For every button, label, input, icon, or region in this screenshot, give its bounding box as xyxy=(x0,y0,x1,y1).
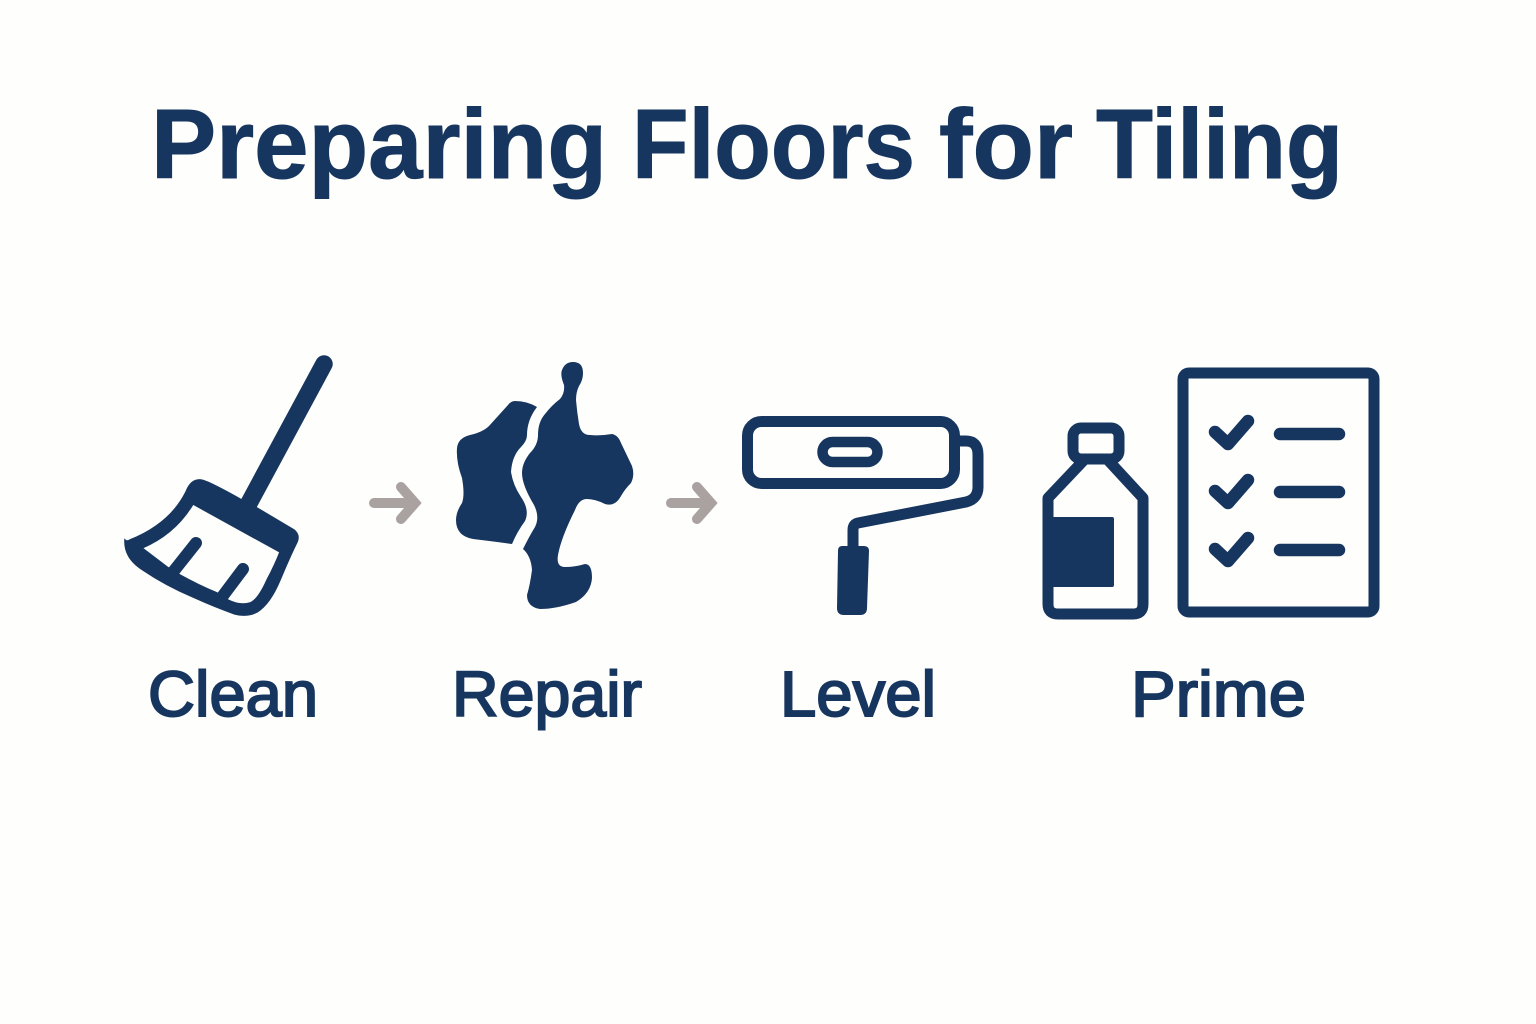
icon: broom xyxy=(125,364,324,615)
icon: checklist xyxy=(1183,373,1374,612)
label: Clean: Clean xyxy=(148,658,318,730)
title: Preparing xyxy=(151,89,607,199)
icon: primer bottle xyxy=(1043,428,1143,614)
title xyxy=(151,89,1343,199)
title: Floors xyxy=(632,89,915,199)
title: Tiling xyxy=(1096,89,1343,199)
arrow: clean to repair xyxy=(374,487,415,519)
icon: paint roller xyxy=(748,422,978,615)
title: for xyxy=(939,89,1073,199)
label: Repair: Repair xyxy=(452,658,642,730)
arrow: repair to level xyxy=(671,487,711,519)
label: Level: Level xyxy=(780,658,936,730)
icon: floor patch repair xyxy=(456,362,633,609)
label: Prime: Prime xyxy=(1131,658,1306,730)
